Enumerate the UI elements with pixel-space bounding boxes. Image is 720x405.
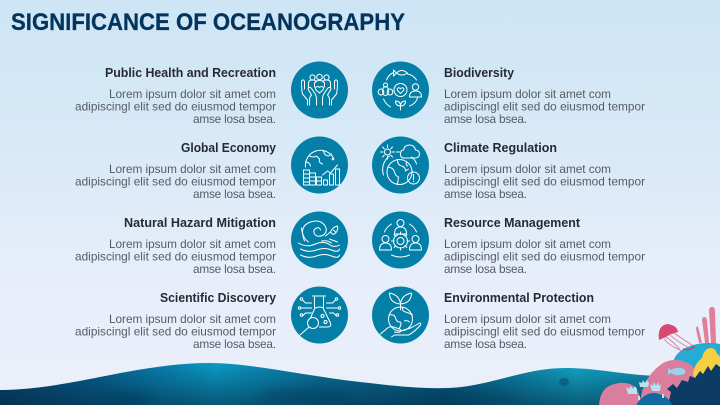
left item: Natural Hazard Mitigation: Natural Hazard Mitigation: [124, 216, 276, 230]
left item: Scientific Discovery: Lorem ipsum dolor sit amet com: [109, 312, 276, 326]
right item: Resource Management: Lorem ipsum dolor sit amet com: [444, 237, 611, 251]
coral reef illustration: [599, 307, 720, 405]
left item: Natural Hazard Mitigation: [75, 216, 276, 276]
right item: Environmental Protection: adipiscingl elit sed do eiusmod tempor: [444, 324, 645, 338]
right item: Climate Regulation: adipiscingl elit sed do eiusmod tempor: [444, 174, 645, 188]
dark blue foreground coral: [667, 364, 720, 405]
right item: Biodiversity: Biodiversity: [444, 66, 514, 80]
blue hill: [673, 343, 720, 405]
right item: Biodiversity: amse losa bsea.: [444, 112, 527, 126]
icon: hand holding globe and leaves: [372, 286, 429, 344]
left item: Public Health and Recreation: [75, 66, 276, 126]
icon: wave and storm: [291, 212, 348, 268]
left item: Scientific Discovery: amse losa bsea.: [193, 337, 276, 351]
left item: Public Health and Recreation: Public Health and Recreation: [105, 66, 276, 80]
right item: Climate Regulation: Lorem ipsum dolor sit amet com: [444, 162, 611, 176]
title: SIGNIFICANCE OF OCEANOGRAPHY: [11, 9, 405, 36]
right item: Environmental Protection: [444, 291, 645, 351]
left item: Global Economy: Global Economy: [181, 141, 276, 155]
icon: globe and finance chart: [291, 136, 348, 194]
right item: Resource Management: amse losa bsea.: [444, 262, 527, 276]
right item: Resource Management: Resource Management: [444, 216, 581, 230]
right item: Environmental Protection: Lorem ipsum dolor sit amet com: [444, 312, 611, 326]
right item: Resource Management: [444, 216, 645, 276]
right item: Resource Management: adipiscingl elit sed do eiusmod tempor: [444, 250, 645, 264]
right item: Climate Regulation: Climate Regulation: [444, 141, 557, 155]
icon: biodiversity cycle: [372, 62, 429, 118]
right item: Biodiversity: adipiscingl elit sed do eiusmod tempor: [444, 100, 645, 114]
icon: hands holding people: [291, 62, 348, 118]
right item: Environmental Protection: amse losa bsea.: [444, 337, 527, 351]
right item: Environmental Protection: Environmental Protection: [444, 291, 594, 305]
coral stalks: [696, 307, 716, 344]
small fish: [668, 368, 686, 375]
right item: Biodiversity: Lorem ipsum dolor sit amet com: [444, 87, 611, 101]
left item: Global Economy: amse losa bsea.: [193, 187, 276, 201]
left item: Public Health and Recreation: amse losa bsea.: [193, 112, 276, 126]
jellyfish: [659, 324, 678, 340]
left item: Global Economy: Lorem ipsum dolor sit amet com: [109, 162, 276, 176]
right item: Climate Regulation: [444, 141, 645, 201]
ocean wave: [0, 363, 720, 405]
left item: Public Health and Recreation: adipiscingl elit sed do eiusmod tempor: [75, 100, 276, 114]
icon: climate globe: [372, 136, 429, 194]
pale anemones: [626, 380, 664, 400]
icon: flask and magnifier: [291, 286, 348, 344]
left item: Public Health and Recreation: Lorem ipsum dolor sit amet com: [109, 87, 276, 101]
left item: Global Economy: adipiscingl elit sed do eiusmod tempor: [75, 174, 276, 188]
left item: Natural Hazard Mitigation: amse losa bsea.: [193, 262, 276, 276]
pink coral mound: [640, 360, 705, 405]
left item: Global Economy: [75, 141, 276, 201]
left item: Scientific Discovery: [75, 291, 276, 351]
yellow coral: [693, 348, 720, 385]
left item: Natural Hazard Mitigation: Lorem ipsum dolor sit amet com: [109, 237, 276, 251]
left item: Scientific Discovery: adipiscingl elit sed do eiusmod tempor: [75, 324, 276, 338]
right item: Climate Regulation: amse losa bsea.: [444, 187, 527, 201]
icon: people and gear: [372, 212, 429, 268]
left item: Natural Hazard Mitigation: adipiscingl elit sed do eiusmod tempor: [75, 250, 276, 264]
left item: Scientific Discovery: Scientific Discovery: [160, 291, 276, 305]
right item: Biodiversity: [444, 66, 645, 126]
